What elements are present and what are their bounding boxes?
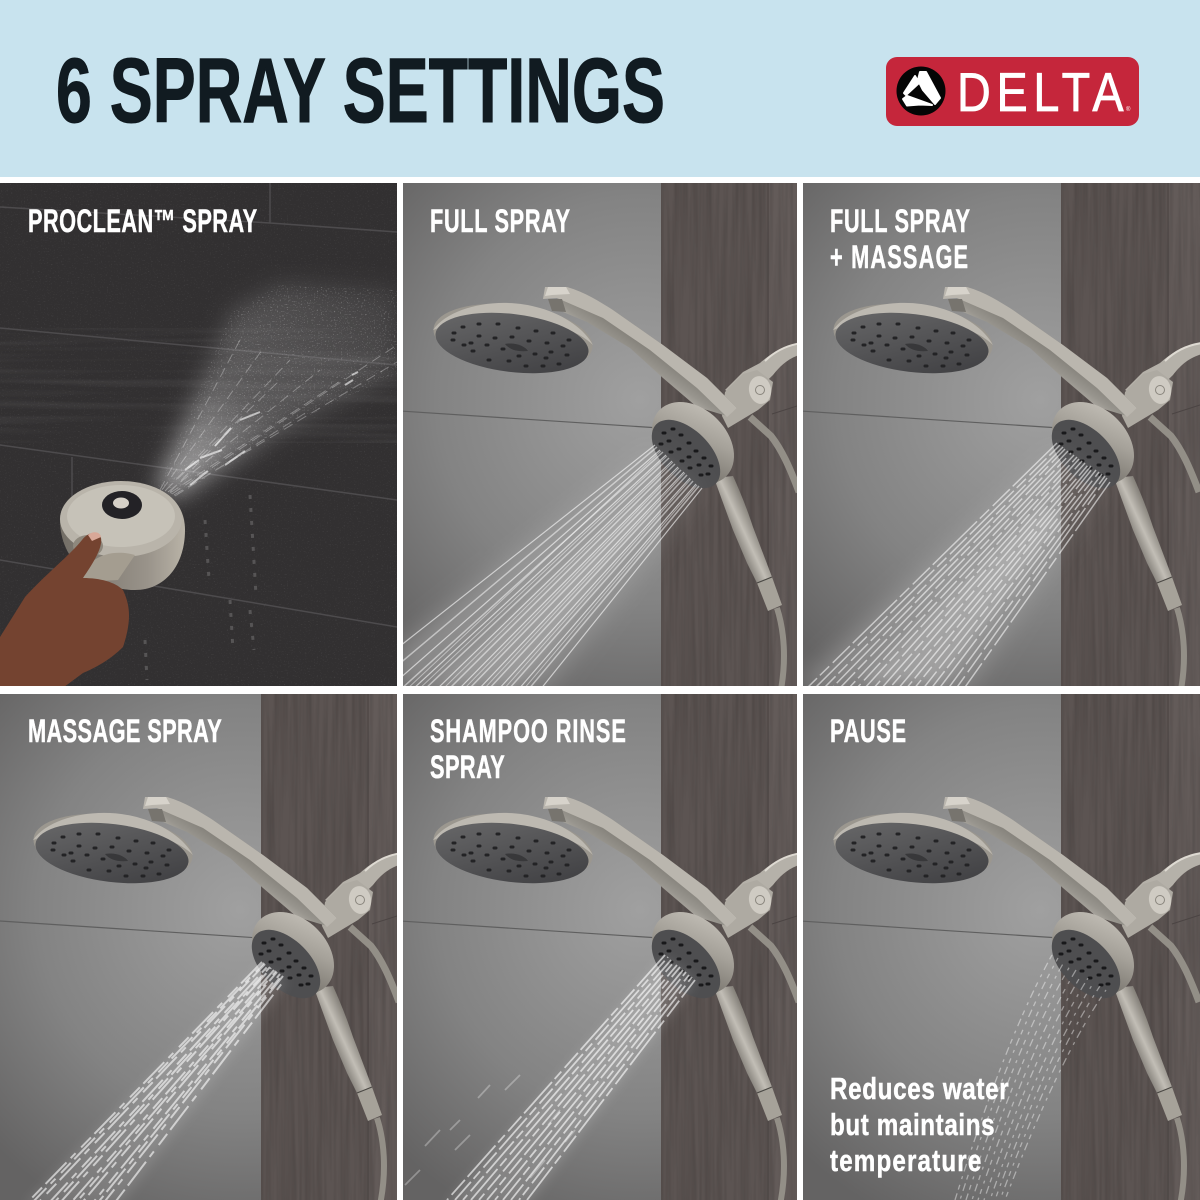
label: PROCLEAN™ SPRAY <box>28 203 257 239</box>
label: SPRAY <box>430 749 505 785</box>
spray <box>25 962 288 1200</box>
faint trickle <box>955 955 1106 1200</box>
description: but maintains <box>830 1107 995 1142</box>
description: temperature <box>830 1143 981 1178</box>
fixture <box>430 797 802 1200</box>
panel: Shampoo rinse spray <box>400 690 802 1200</box>
logo: Delta: ® <box>1126 106 1131 113</box>
label: PAUSE <box>830 713 906 749</box>
panel: Full spray + massage <box>800 180 1200 695</box>
header band <box>0 0 1200 177</box>
label <box>430 719 626 778</box>
label: FULL SPRAY <box>830 203 970 239</box>
label: SHAMPOO RINSE <box>430 713 626 749</box>
spray fan <box>157 285 400 497</box>
panel: Massage spray <box>0 690 402 1200</box>
description <box>830 1071 1009 1178</box>
label: + MASSAGE <box>830 239 968 275</box>
panel: Pause <box>800 690 1200 1200</box>
button <box>102 491 142 519</box>
label <box>830 209 970 268</box>
shower head held in hand <box>60 481 185 590</box>
description: Reduces water <box>830 1071 1009 1106</box>
spray <box>395 445 705 690</box>
fixture <box>430 287 802 695</box>
spray <box>405 955 695 1200</box>
hand <box>0 533 129 690</box>
thumbnail <box>88 532 101 541</box>
label: MASSAGE SPRAY <box>28 713 222 749</box>
logo: Delta: DELTA <box>957 61 1124 123</box>
fixture <box>30 797 402 1200</box>
panel: ProClean spray <box>0 180 400 690</box>
title: 6 SPRAY SETTINGS <box>56 39 665 142</box>
panel: Full spray <box>395 180 802 695</box>
fixture <box>830 797 1200 1200</box>
label: FULL SPRAY <box>430 203 570 239</box>
logo: Delta <box>886 57 1139 126</box>
spray <box>805 443 1110 690</box>
fixture <box>830 287 1200 695</box>
